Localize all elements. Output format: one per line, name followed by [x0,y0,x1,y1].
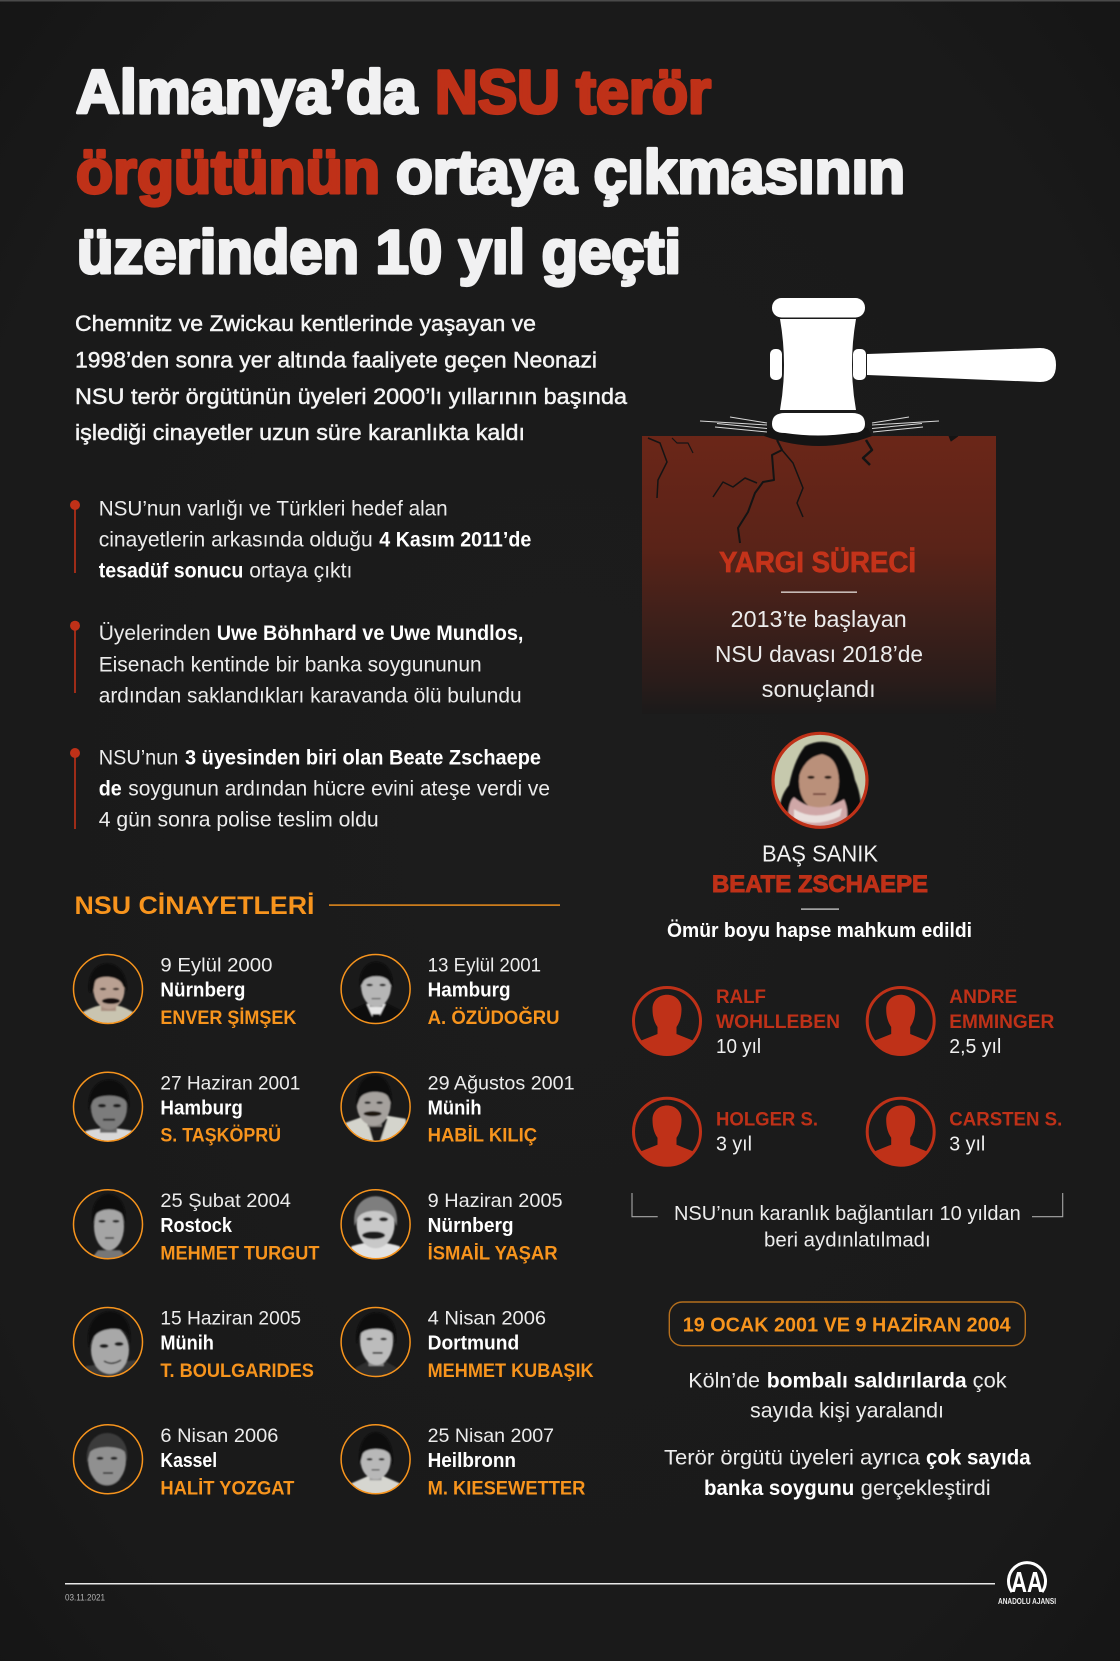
victim: Mehmet Kubaşık: 4 Nisan 2006 [428,1308,546,1330]
victim: İsmail Yaşar [341,1190,563,1264]
victim: Mehmet Turgut: MEHMET TURGUT [160,1242,319,1264]
bullet 2: Uwe Böhnhard ve Uwe Mundlos, [217,622,523,645]
main defendant caption: BAŞ SANIK [762,841,879,867]
panel: yargı süreci [642,436,996,714]
victim: T. Boulgarides: Münih [160,1333,214,1355]
logo: Anadolu Ajansı: ANADOLU AJANSI [998,1597,1056,1606]
footer date: 03.11.2021 [65,1593,105,1603]
victim: M. Kiesewetter: M. KIESEWETTER [428,1477,585,1499]
defendant: Ralf Wohlleben: 10 yıl [716,1035,761,1058]
victim: Habil Kılıç: Münih [428,1097,482,1119]
logo: Anadolu Ajansı [998,1563,1056,1606]
victim: Enver Şimşek: 9 Eylül 2000 [160,955,273,977]
victim: Enver Şimşek: ENVER ŞİMŞEK [160,1006,296,1029]
cracks in ground [648,436,958,543]
text: bank robberies: gerçekleştirdi [861,1476,991,1500]
panel: yargı süreci: NSU davası 2018’de [715,641,923,667]
victim: Mehmet Turgut [74,1190,319,1264]
victim: Enver Şimşek: Nürnberg [160,980,245,1002]
victim: S. Taşköprü: Hamburg [160,1097,243,1119]
text: Köln bombings: Köln’de [688,1368,760,1392]
text: bank robberies: banka soygunu [704,1476,854,1500]
bullet 3: NSU’nun [99,745,178,769]
text: Köln bombings [688,1368,1007,1423]
victim: Halit Yozgat: Kassel [160,1450,217,1472]
defendant: Andre Emminger: ANDRE [949,986,1017,1008]
defendant: Andre Emminger: 2,5 yıl [949,1035,1001,1058]
defendant: Ralf Wohlleben [634,986,840,1061]
victim: S. Taşköprü: 27 Haziran 2001 [160,1072,300,1094]
bullet 2: ardından saklandıkları karavanda ölü bulundu [99,683,522,707]
intro paragraph [75,311,628,445]
bullet 1: 4 Kasım 2011’de [379,529,531,552]
text: bank robberies [664,1445,1032,1500]
portrait: Beate Zschaepe [773,733,867,828]
defendant: Carsten S.: 3 yıl [949,1133,985,1156]
bullet 2: Eisenach kentinde bir banka soygununun [99,652,482,676]
intro paragraph: işlediği cinayetler uzun süre karanlıkta kaldı [75,420,525,445]
bullet 2: Üyelerinden [99,621,211,645]
text: Köln bombings: çok [973,1368,1007,1392]
intro paragraph: Chemnitz ve Zwickau kentlerinde yaşayan ve [75,311,536,336]
bullet 1: cinayetlerin arkasında olduğu [99,528,373,552]
victim: Mehmet Kubaşık: MEHMET KUBAŞIK [428,1360,594,1382]
title: Almanya’da [76,58,418,126]
victim: T. Boulgarides: T. BOULGARIDES [160,1360,314,1382]
heading: NSU cinayetleri: NSU CİNAYETLERİ [74,892,314,920]
victim: T. Boulgarides: 15 Haziran 2005 [160,1308,301,1330]
note: karanlık bağlantılar [632,1193,1063,1252]
defendant: Holger S.: 3 yıl [716,1133,752,1156]
victim: Mehmet Turgut: 25 Şubat 2004 [160,1190,291,1212]
bullet 1: tesadüf sonucu [99,560,243,583]
title: üzerinden 10 yıl geçti [77,218,681,286]
text: bank robberies: Terör örgütü üyeleri ayrıca [664,1445,920,1469]
title: örgütünün [76,138,380,206]
defendant: Carsten S. [867,1098,1062,1172]
defendant: Ralf Wohlleben: WOHLLEBEN [716,1011,840,1033]
main defendant caption: BEATE ZSCHAEPE [712,871,928,898]
victim: Mehmet Kubaşık [341,1308,594,1382]
text: bank robberies: çok sayıda [926,1445,1032,1469]
victim: S. Taşköprü [74,1072,300,1147]
defendant: Carsten S.: CARSTEN S. [949,1109,1062,1131]
victim: Mehmet Turgut: Rostock [160,1215,233,1237]
victim: Habil Kılıç [341,1072,575,1147]
date badge [669,1302,1025,1346]
victim: Halit Yozgat: HALİT YOZGAT [160,1476,294,1499]
defendant: Holger S.: HOLGER S. [716,1109,818,1131]
title: ortaya çıkmasının [396,138,905,206]
bullet 1: ortaya çıktı [249,559,352,583]
defendant: Andre Emminger: EMMINGER [949,1011,1054,1033]
bullet 2 [70,621,523,707]
main defendant caption: Ömür boyu hapse mahkum edildi [667,919,972,942]
logo: Anadolu Ajansı: AA [1011,1567,1043,1599]
victim: S. Taşköprü: S. TAŞKÖPRÜ [160,1124,281,1147]
victim: A. Özüdoğru: 13 Eylül 2001 [428,955,541,977]
victim: İsmail Yaşar: 9 Haziran 2005 [428,1190,563,1212]
bullet 3: 4 gün sonra polise teslim oldu [99,808,379,832]
defendant: Andre Emminger [867,986,1054,1061]
victim: İsmail Yaşar: Nürnberg [428,1215,514,1237]
bullet 1: NSU’nun varlığı ve Türkleri hedef alan [99,497,448,521]
victim: Halit Yozgat [74,1425,294,1499]
victim: İsmail Yaşar: İSMAİL YAŞAR [428,1241,558,1264]
footer rule [65,1583,995,1584]
victim: Habil Kılıç: 29 Ağustos 2001 [428,1072,575,1094]
bullet 3: 3 üyesinden biri olan Beate Zschaepe [185,746,541,769]
victim: Mehmet Kubaşık: Dortmund [428,1333,519,1355]
panel: yargı süreci: sonuçlandı [762,676,876,702]
defendant: Ralf Wohlleben: RALF [716,986,766,1008]
text: Köln bombings: bombalı saldırılarda [767,1368,968,1392]
panel: yargı süreci: 2013’te başlayan [731,606,907,632]
victim: M. Kiesewetter [341,1425,585,1499]
victim: Habil Kılıç: HABİL KILIÇ [428,1124,537,1147]
title: NSU terör [435,58,711,126]
note: karanlık bağlantılar: NSU’nun karanlık bağlantıları 10 yıldan [674,1203,1021,1225]
bullet 1 [70,497,531,583]
victim: Halit Yozgat: 6 Nisan 2006 [160,1425,278,1447]
victim: M. Kiesewetter: Heilbronn [428,1450,516,1472]
intro paragraph: 1998’den sonra yer altında faaliyete geçen Neonazi [75,348,597,373]
defendant: Holger S. [634,1098,818,1172]
victim: Enver Şimşek [74,954,296,1029]
main defendant caption [667,841,972,942]
intro paragraph: NSU terör örgütünün üyeleri 2000’lı yıllarının başında [75,384,628,409]
victim: M. Kiesewetter: 25 Nisan 2007 [428,1425,554,1447]
bullet 3: soygunun ardından hücre evini ateşe verdi ve [128,777,550,801]
date badge: 19 OCAK 2001 VE 9 HAZİRAN 2004 [683,1314,1011,1337]
victim: T. Boulgarides [74,1308,314,1382]
victim: A. Özüdoğru: A. ÖZÜDOĞRU [428,1006,560,1029]
victim: A. Özüdoğru: Hamburg [428,980,511,1002]
note: karanlık bağlantılar: beri aydınlatılmadı [764,1230,931,1252]
icon: gavel [700,298,1056,446]
victim: A. Özüdoğru [341,954,560,1029]
text: Köln bombings: sayıda kişi yaralandı [750,1399,944,1423]
panel heading: YARGI SÜRECİ [719,546,916,579]
bullet 3: de [99,778,122,801]
bullet 3 [70,745,550,832]
title [76,58,905,286]
